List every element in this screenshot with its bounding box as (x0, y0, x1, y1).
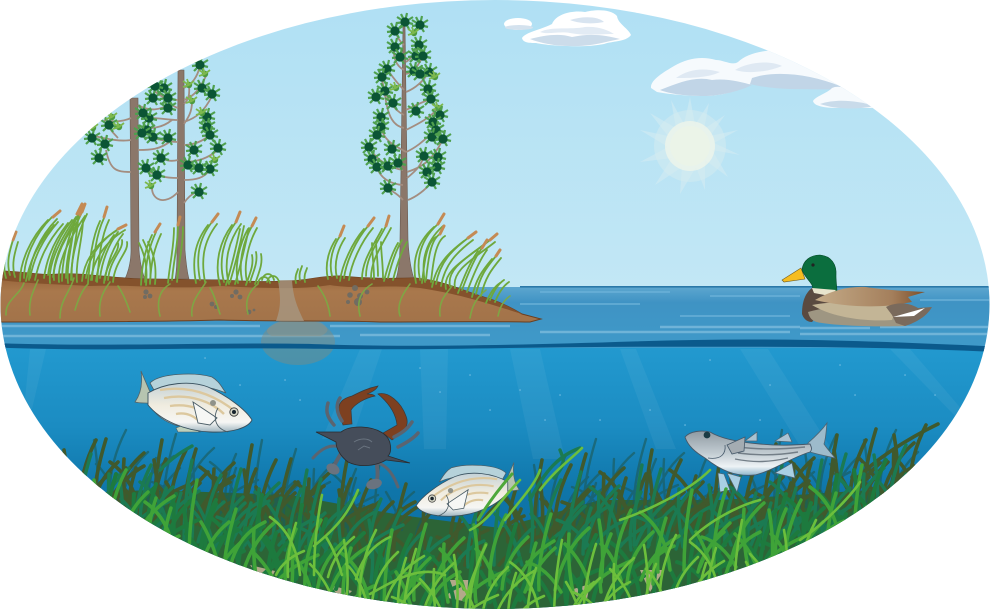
land: island shoreline (0, 271, 541, 322)
cloud: upper (504, 10, 631, 46)
seagrass: back layer (30, 424, 974, 609)
seagrass: front layer (60, 448, 945, 609)
tree: left pine (84, 98, 172, 279)
duck: mallard (782, 255, 932, 326)
sediment runoff (261, 319, 335, 365)
cloud: middle large (651, 50, 850, 96)
crab: blue crab (313, 386, 418, 491)
surface water (0, 286, 990, 349)
sky (0, 0, 990, 288)
fish: striped mullet (685, 423, 835, 492)
shoreline marsh grass (4, 204, 510, 318)
waterline (0, 340, 990, 351)
tree: middle pine (134, 56, 226, 279)
sun (640, 97, 740, 194)
fish: pinfish lower (416, 462, 519, 516)
cloud: right small (813, 86, 872, 108)
tree: right pine (361, 13, 451, 279)
rocks (143, 285, 369, 314)
underwater body (0, 348, 990, 609)
bubbles (205, 358, 935, 425)
light rays underwater (24, 349, 970, 459)
fish: pinfish upper left (135, 371, 252, 432)
